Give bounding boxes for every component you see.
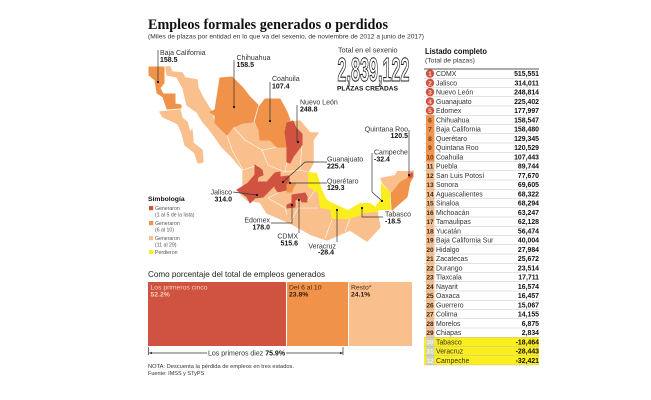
ranking table: 28 [426, 321, 434, 328]
map labels: Tabasco [385, 212, 411, 218]
bar chart: share of total: Los primeros cinco [150, 284, 208, 292]
ranking table: 14,155 [518, 312, 539, 318]
ranking table: -32,421 [516, 358, 539, 365]
ranking table: 16,457 [518, 293, 539, 300]
text: 2,839,122 [338, 51, 410, 88]
map labels: -18.5 [385, 218, 401, 226]
ranking table: 24 [426, 284, 434, 291]
ranking table: 32 [426, 358, 434, 365]
legend: (1 al 5 de la lista) [155, 212, 195, 218]
ranking table: Coahuila [436, 154, 463, 161]
map labels: Nuevo León [300, 100, 338, 106]
map labels: Campeche [374, 150, 408, 156]
bracket: first ten [148, 347, 343, 358]
map: yellow states (lost jobs) [308, 172, 391, 219]
map of Mexico [149, 50, 413, 242]
ranking table: 22 [426, 265, 434, 272]
ranking table: Querétaro [436, 136, 467, 143]
ranking table: Tlaxcala [436, 274, 462, 282]
list heading: (Total de plazas) [425, 58, 475, 64]
ranking table: 30 [426, 339, 434, 346]
bar chart: share of total: 24.1% [351, 292, 370, 298]
ranking table: Chiapas [436, 330, 462, 337]
ranking table: Nuevo León [436, 90, 473, 96]
ranking table: Puebla [436, 164, 458, 170]
ranking table: 68,294 [518, 200, 539, 208]
map labels: CDMX [277, 234, 298, 240]
ranking table: 25 [426, 293, 434, 300]
legend [148, 196, 195, 256]
ranking table: 7 [428, 126, 432, 134]
ranking table: Veracruz [436, 348, 464, 356]
note and source: NOTA: Descuenta la pérdida de empleos en tres estados. [148, 364, 294, 370]
ranking table: Edomex [436, 108, 462, 115]
ranking table: CDMX [436, 71, 457, 78]
map labels [160, 50, 411, 256]
ranking table: Oaxaca [436, 293, 460, 300]
map labels: 129.3 [327, 185, 345, 192]
ranking table: 225,402 [514, 99, 539, 106]
ranking table: Aguascalientes [436, 191, 483, 198]
map labels: 158.5 [236, 62, 254, 69]
bar chart: share of total: Como porcentaje del total de empleos generados [148, 269, 325, 279]
ranking table: 158,547 [514, 117, 539, 124]
map: state borders [227, 127, 350, 238]
ranking table: 5 [428, 108, 432, 115]
ranking table: 12 [426, 173, 434, 180]
ranking table: Zacatecas [436, 256, 468, 263]
list heading [425, 47, 487, 64]
ranking table: 4 [428, 99, 432, 106]
ranking table: 158,480 [514, 126, 539, 134]
ranking table: Sinaloa [436, 200, 459, 208]
map labels: Guanajuato [327, 156, 363, 164]
legend: Perdieron [155, 250, 178, 256]
ranking table: Durango [436, 265, 463, 272]
ranking table: Hidalgo [436, 247, 460, 254]
map labels: Querétaro [327, 178, 359, 186]
ranking table: 2 [428, 80, 432, 87]
ranking table: 3 [428, 90, 432, 96]
legend: (6 al 10) [155, 228, 174, 234]
legend: Generaron [155, 221, 180, 227]
ranking table: 17 [426, 219, 434, 226]
ranking table: 9 [428, 145, 432, 152]
map labels: 107.4 [272, 84, 290, 90]
ranking table: Tamaulipas [436, 219, 471, 226]
ranking table: Tabasco [436, 339, 462, 346]
ranking table: Campeche [436, 358, 469, 365]
ranking table: 26 [426, 302, 434, 309]
total callout: PLAZAS CREADAS [337, 86, 398, 92]
ranking table: Guerrero [436, 302, 464, 309]
ranking table [424, 69, 539, 365]
ranking table: 77,670 [518, 173, 539, 180]
ranking table: 515,551 [514, 71, 539, 78]
map labels: Coahuila [272, 76, 300, 83]
ranking table: San Luis Potosí [436, 173, 484, 180]
note and source: Fuente: IMSS y STyPS [148, 371, 205, 377]
ranking table: 16,574 [518, 284, 539, 291]
ranking table: 11 [427, 164, 434, 170]
map: dark states (top 5) [237, 121, 412, 208]
bar chart: share of total: 52.2% [150, 292, 170, 298]
map labels: 314.0 [214, 196, 232, 204]
ranking table: 27 [426, 312, 434, 318]
ranking table: Baja California [436, 126, 481, 134]
ranking table: 15 [426, 200, 434, 208]
ranking table: 177,997 [514, 108, 539, 115]
legend: Generaron [155, 236, 180, 242]
ranking table: 69,605 [518, 182, 539, 189]
map: light states [160, 67, 380, 241]
ranking table: Quintana Roo [436, 145, 479, 152]
list heading: Listado completo [425, 47, 487, 56]
total callout [337, 46, 410, 92]
map labels: Veracruz [308, 244, 336, 250]
ranking table: 2,834 [522, 330, 539, 337]
ranking table: 314,011 [514, 80, 539, 87]
total callout: Total en el sexenio [338, 46, 398, 54]
map labels: Quintana Roo [365, 126, 408, 134]
map labels: Chihuahua [236, 55, 270, 62]
ranking table: Colima [436, 312, 458, 318]
ranking table: 29 [426, 330, 434, 337]
ranking table: 25,672 [518, 256, 539, 263]
ranking table: Morelos [436, 321, 461, 328]
ranking table: 40,004 [518, 238, 539, 244]
map: orange states (6 to 10) [149, 67, 413, 210]
ranking table: Sonora [436, 182, 458, 189]
ranking table: 10 [426, 154, 434, 161]
ranking table: 23 [426, 274, 434, 282]
ranking table: 19 [426, 238, 434, 244]
ranking table: 129,345 [514, 136, 539, 143]
ranking table: 56,474 [518, 228, 539, 235]
ranking table: 21 [426, 256, 434, 263]
ranking table: 68,322 [518, 191, 539, 198]
ranking table: 248,814 [514, 90, 539, 96]
map labels: 225.4 [327, 164, 345, 170]
legend: (11 al 29) [155, 242, 177, 248]
ranking table: 31 [426, 348, 434, 356]
ranking table: Nayarit [436, 284, 458, 291]
subtitle: (Miles de plazas por entidad en lo que va del sexenio, de noviembre de 2012 a junio de 2017) [148, 34, 424, 40]
note and source [148, 364, 294, 377]
ranking table: Yucatán [436, 228, 461, 235]
ranking table: 6 [428, 117, 432, 124]
ranking table: 27,984 [518, 247, 539, 254]
map: Yucatan [380, 171, 412, 192]
ranking table: 15,067 [518, 302, 539, 309]
ranking table: 23,514 [518, 265, 539, 272]
ranking table: 6,875 [522, 321, 539, 328]
ranking table: Chihuahua [436, 117, 470, 124]
map labels: 515.6 [280, 240, 298, 248]
map labels: -28.4 [318, 250, 334, 256]
ranking table: 20 [426, 247, 434, 254]
map labels: Jalisco [211, 190, 232, 196]
map labels: Edomex [244, 218, 270, 224]
title: Empleos formales generados o perdidos [148, 17, 388, 33]
ranking table: -18,464 [516, 339, 539, 346]
ranking table: -28,443 [516, 348, 539, 356]
ranking table: 107,443 [514, 154, 539, 161]
bar chart: share of total [148, 269, 412, 346]
ranking table: 62,128 [518, 219, 539, 226]
bar chart: share of total: Resto* [351, 284, 372, 292]
bar chart: share of total: Del 6 al 10 [289, 284, 322, 292]
ranking table: 17,711 [518, 274, 539, 282]
bracket: first ten: Los primeros diez 75.9% [208, 350, 286, 358]
ranking table: 18 [426, 228, 434, 235]
ranking table: Guanajuato [436, 99, 472, 106]
map labels: 120.5 [390, 133, 408, 140]
ranking table: 13 [426, 182, 434, 189]
map labels: -32.4 [374, 156, 390, 164]
ranking table: Michoacán [436, 210, 469, 217]
bar chart: share of total: 23.8% [289, 292, 308, 298]
ranking table: 16 [426, 210, 434, 217]
ranking table: 14 [426, 191, 434, 198]
map labels: Baja California [160, 50, 206, 57]
legend: Simbología [148, 196, 185, 203]
map dots [157, 81, 410, 211]
ranking table: 63,247 [518, 210, 539, 217]
ranking table: 120,529 [514, 145, 539, 152]
ranking table: Baja California Sur [436, 238, 494, 244]
ranking table: Jalisco [436, 80, 457, 87]
leader lines [158, 50, 409, 242]
ranking table: 89,744 [518, 164, 539, 170]
map labels: 158.5 [160, 57, 178, 64]
ranking table: 1 [428, 71, 432, 78]
legend: Generaron [155, 206, 180, 212]
ranking table: 8 [428, 136, 432, 143]
map labels: 248.8 [300, 106, 318, 114]
map labels: 178.0 [252, 224, 270, 232]
